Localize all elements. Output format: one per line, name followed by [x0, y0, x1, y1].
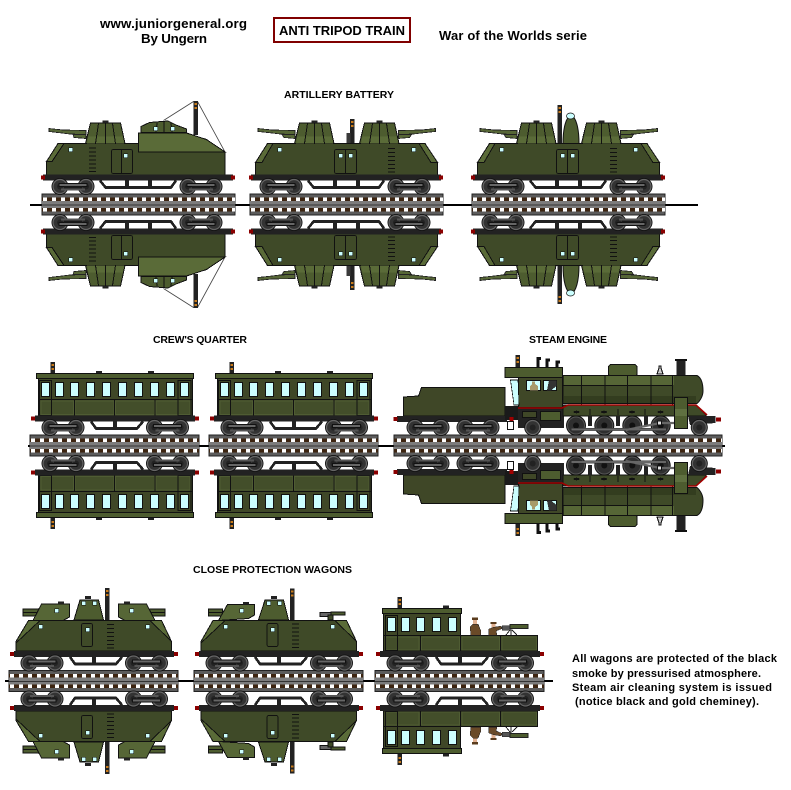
mirrored lower half [471, 214, 665, 304]
top half [210, 362, 378, 436]
note text: smoke by pressurised atmosphere. [572, 668, 761, 680]
note text: (notice black and gold cheminey). [575, 696, 759, 708]
mirrored lower half [41, 214, 235, 308]
wagon: crew carriage 2 [209, 362, 378, 529]
note text: Steam air cleaning system is issued [572, 682, 772, 694]
rail line: row 3 [5, 680, 553, 682]
track [375, 670, 544, 692]
header credit: www.juniorgeneral.org [99, 16, 247, 31]
header credit: By Ungern [141, 31, 207, 46]
rail line: row 1 [30, 204, 698, 206]
rail line: row 2 [28, 445, 725, 447]
wagon: artillery car 3 with balloon [471, 105, 665, 304]
top half [195, 588, 363, 672]
track [42, 194, 235, 215]
track [472, 194, 665, 215]
machine gun [502, 624, 528, 635]
wagon: crew carriage 1 [30, 362, 199, 529]
top half [10, 588, 178, 672]
mirrored lower half [10, 690, 178, 774]
series name: War of the Worlds serie [439, 28, 587, 43]
wagon: protection car 2 [194, 588, 363, 774]
heading: steam engine: STEAM ENGINE [529, 334, 607, 346]
top half with observation mast [41, 101, 235, 195]
heading: artillery battery: ARTILLERY BATTERY [284, 89, 394, 101]
mirrored lower half [210, 455, 378, 529]
header credit [99, 16, 247, 46]
top half [394, 355, 721, 436]
wagon: protection car 1 [9, 588, 178, 774]
track [30, 435, 199, 456]
note text: All wagons are protected of the black [572, 653, 778, 665]
top half [249, 119, 443, 195]
top half [376, 597, 544, 672]
title box [274, 18, 410, 42]
wagon: artillery car 1 [41, 101, 235, 308]
soldier firing [488, 622, 502, 635]
mirrored lower half [249, 214, 443, 290]
track [9, 670, 178, 692]
track [250, 194, 443, 215]
wagon: protection car 3 with machine gunners [375, 597, 544, 765]
title box: ANTI TRIPOD TRAIN [279, 23, 405, 38]
heading: crew's quarter: CREW'S QUARTER [153, 334, 247, 346]
mirrored lower half [195, 690, 363, 774]
track [394, 435, 722, 456]
mirrored lower half [394, 455, 721, 536]
mirrored lower half [376, 690, 544, 765]
mirrored lower half [31, 455, 199, 529]
heading: close protection wagons: CLOSE PROTECTION WAGONS [193, 564, 352, 576]
track [194, 670, 363, 692]
top half [31, 362, 199, 436]
wagon: artillery car 2 [249, 119, 443, 290]
soldier standing [470, 618, 480, 635]
steam engine with tender [394, 355, 722, 536]
top half [471, 105, 665, 195]
note text [572, 653, 778, 708]
track [209, 435, 378, 456]
